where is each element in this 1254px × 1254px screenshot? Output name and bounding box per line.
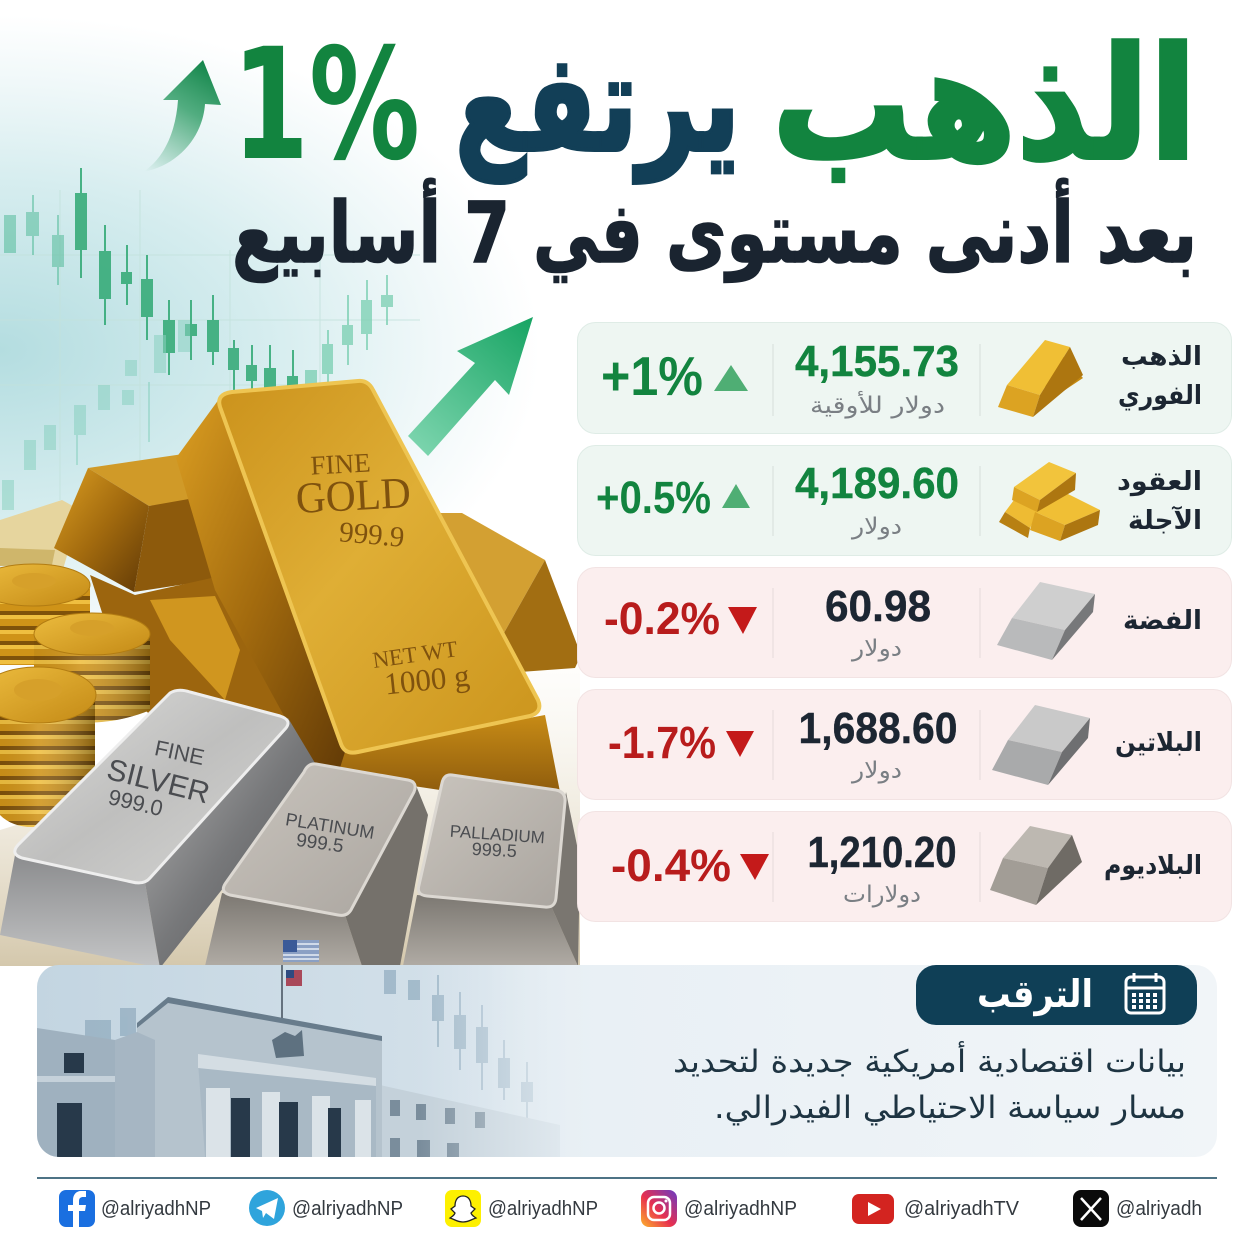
far right wing <box>380 1085 560 1157</box>
snapchat: @alriyadhNP <box>488 1198 598 1220</box>
outlook panel <box>37 960 1217 1157</box>
gold bar left side <box>176 395 345 790</box>
change: -0.2% <box>604 593 720 644</box>
unit: دولار <box>851 636 902 662</box>
change: -0.4% <box>611 840 731 891</box>
coin stack rear <box>0 564 90 665</box>
instagram: @alriyadhNP <box>684 1198 797 1220</box>
silver bar <box>0 690 318 968</box>
facebook <box>59 1190 211 1227</box>
price: 1,688.60 <box>798 704 958 753</box>
upper flag <box>283 940 319 962</box>
name: البلاديوم <box>1104 851 1202 881</box>
youtube <box>852 1194 1020 1224</box>
icon: platinum bar <box>992 705 1090 785</box>
icon: gold bar <box>998 340 1083 417</box>
row 4: platinum <box>578 690 1232 800</box>
gold bar stamp: 1000 g <box>383 658 471 701</box>
panel fade <box>442 992 560 1157</box>
unit: دولار <box>851 758 902 784</box>
telegram <box>249 1190 403 1226</box>
x <box>1073 1190 1202 1227</box>
pale far gold bar <box>0 500 72 567</box>
panel body text <box>673 1041 1186 1126</box>
main block <box>137 997 382 1157</box>
up triangle <box>722 484 750 508</box>
gold bar base <box>340 715 560 790</box>
palladium bar stamp: 999.5 <box>471 839 517 861</box>
lower flag <box>286 970 302 986</box>
icon: calendar <box>1126 973 1164 1013</box>
title <box>232 14 1197 195</box>
unit: دولار للأوقية <box>810 391 945 419</box>
name: الفوري <box>1118 381 1202 411</box>
top-left rising arrow <box>143 60 221 172</box>
platinum bar stamp: 999.5 <box>295 830 345 857</box>
change: +1% <box>601 345 703 407</box>
name <box>1118 342 1202 411</box>
palladium bar stamp <box>450 825 544 857</box>
gold bar top face <box>219 381 539 753</box>
social footer <box>59 1190 1202 1227</box>
federal reserve building <box>37 965 533 1157</box>
icon: silver bar <box>997 582 1095 660</box>
name: الفضة <box>1123 606 1202 636</box>
silver bar stamp: FINE <box>152 735 207 770</box>
down triangle <box>726 731 754 757</box>
left wing <box>37 1028 115 1157</box>
background teal glow <box>0 0 560 830</box>
snapchat <box>445 1190 598 1227</box>
back right gold bar <box>440 513 581 672</box>
telegram: @alriyadhNP <box>292 1198 403 1220</box>
unit: دولار <box>851 514 902 540</box>
change: -1.7% <box>608 717 716 768</box>
heading pill <box>916 965 1197 1025</box>
price rows <box>578 322 1232 922</box>
gold bar stamp: GOLD <box>295 468 412 523</box>
down triangle <box>740 854 769 880</box>
name: العقود <box>1117 467 1202 497</box>
name: البلاتين <box>1115 728 1202 758</box>
down triangle <box>728 607 757 634</box>
icon: palladium bar <box>990 826 1082 905</box>
lower back gold bar <box>90 575 284 716</box>
columns <box>206 1088 371 1157</box>
name: الآجلة <box>1128 505 1202 536</box>
title percentage: 1% <box>232 16 420 195</box>
footer divider <box>37 1177 1217 1179</box>
price: 4,189.60 <box>795 459 959 508</box>
price: 1,210.20 <box>808 828 956 877</box>
coin stack front <box>0 667 96 827</box>
row 1: spot gold <box>578 322 1232 434</box>
title word: gold: الذهب <box>772 14 1197 195</box>
heading: الترقب <box>977 972 1093 1016</box>
back left gold bar <box>54 454 212 592</box>
icon: gold bars stack <box>999 462 1100 541</box>
gold bar stamp: 999.9 <box>338 516 406 554</box>
gold bar stamp <box>295 447 471 701</box>
change: +0.5% <box>596 472 711 523</box>
panel background <box>37 965 1217 1157</box>
candlestick chart background <box>0 168 420 510</box>
row 5: palladium <box>578 812 1232 922</box>
unit: دولارات <box>843 882 921 908</box>
up triangle <box>714 365 748 391</box>
silver bar stamp: SILVER <box>104 753 213 810</box>
name: الذهب <box>1121 342 1202 372</box>
hero illustration: metal bars and coins <box>0 381 581 968</box>
price: 60.98 <box>825 582 931 631</box>
table surface <box>0 701 580 966</box>
eagle statue <box>272 1030 304 1058</box>
palladium bar <box>403 775 580 966</box>
portico <box>198 1062 376 1157</box>
row 2: futures <box>578 446 1232 556</box>
silver bar stamp: 999.0 <box>106 784 165 821</box>
platinum bar stamp: PLATINUM <box>284 809 376 843</box>
instagram <box>641 1190 797 1227</box>
x: @alriyadh <box>1116 1198 1202 1220</box>
large gold bar <box>176 381 560 815</box>
platinum bar <box>205 764 428 966</box>
youtube: @alriyadhTV <box>904 1198 1020 1220</box>
gold bar stamp: FINE <box>310 447 371 481</box>
gold bar stamp: NET WT <box>371 636 459 673</box>
facebook: @alriyadhNP <box>101 1198 211 1220</box>
panel body text: بيانات اقتصادية أمريكية جديدة لتحديد <box>673 1041 1186 1080</box>
coin stack middle <box>34 613 150 723</box>
title word: rises: يرتفع <box>455 25 740 183</box>
price: 4,155.73 <box>795 337 959 386</box>
flag pole <box>281 960 283 1018</box>
row 3: silver <box>578 568 1232 678</box>
panel body text: مسار سياسة الاحتياطي الفيدرالي. <box>714 1090 1186 1126</box>
rising green arrow behind bars <box>408 317 533 456</box>
palladium bar stamp: PALLADIUM <box>449 822 545 847</box>
platinum bar stamp <box>286 813 374 852</box>
doors and windows <box>57 1053 341 1157</box>
name <box>1117 467 1202 536</box>
